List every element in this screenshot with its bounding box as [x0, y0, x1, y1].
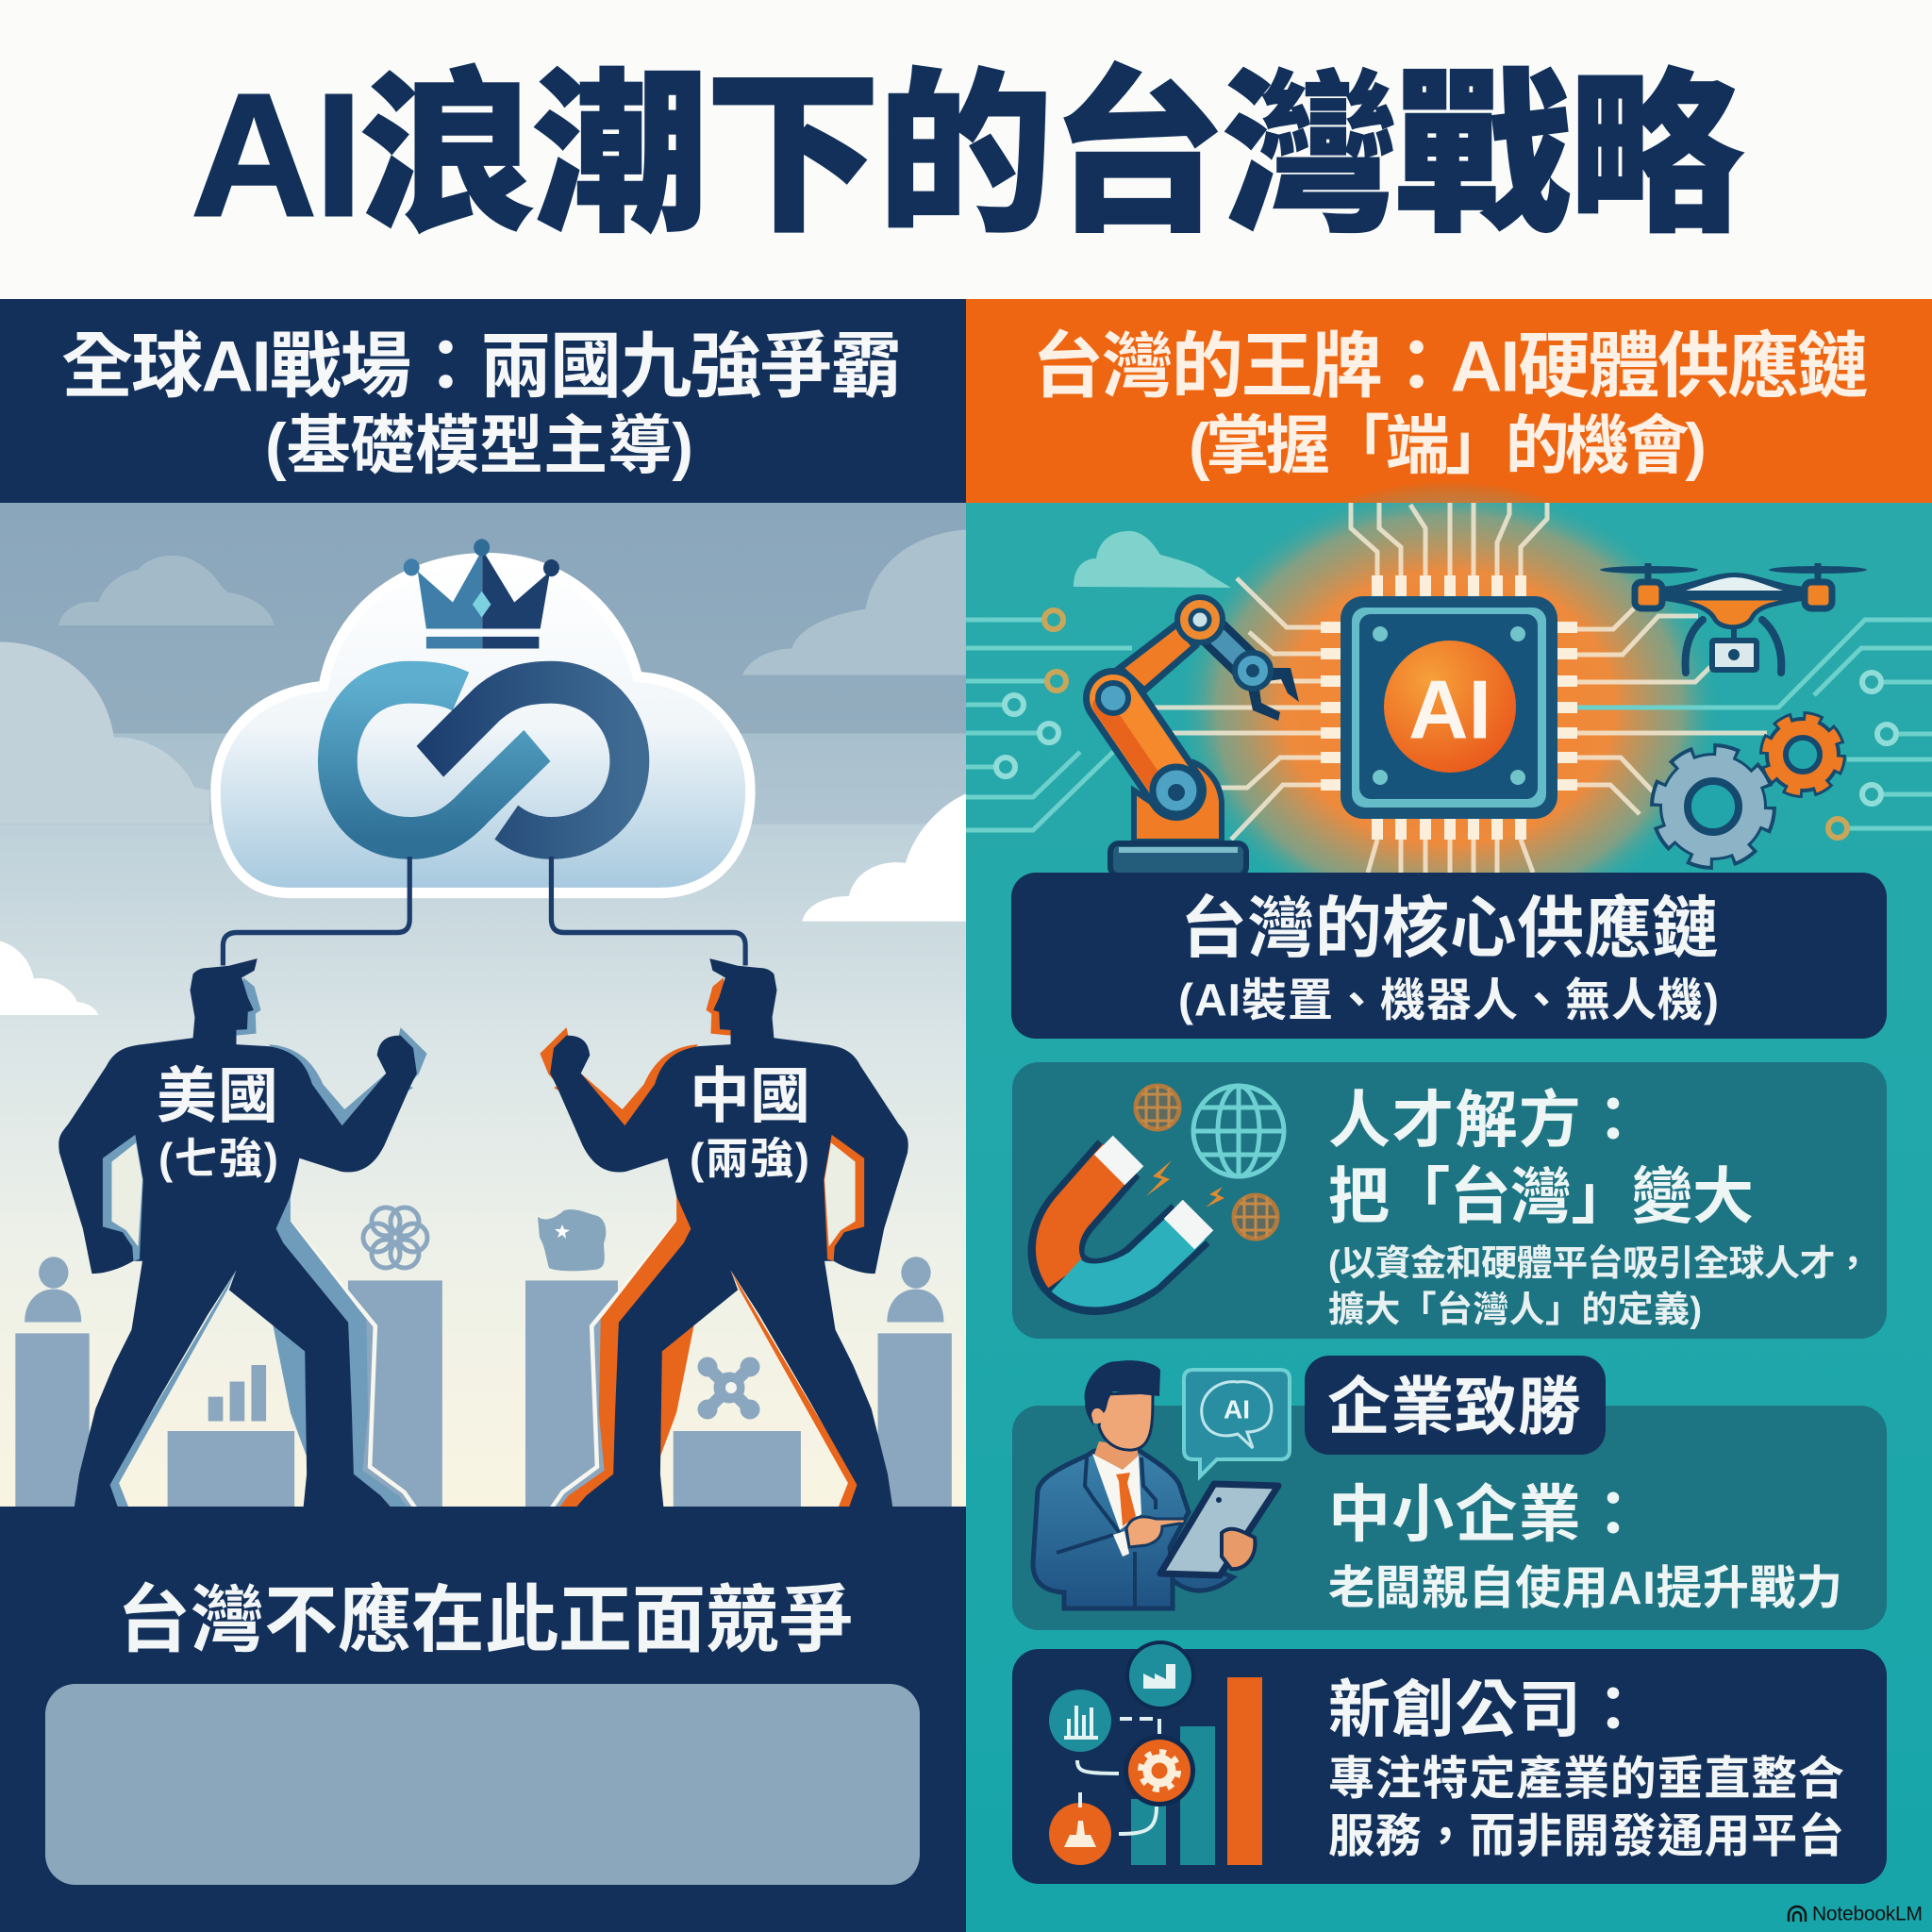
startup description line 2: 服務，而非開發通用平台 [1328, 1811, 1844, 1862]
speech bubble [1184, 1370, 1290, 1476]
chip body [1341, 596, 1557, 819]
title: AI浪潮下的台灣戰略 [191, 58, 1743, 253]
icon: blob logo [538, 1209, 606, 1271]
panel: right header [966, 299, 1932, 503]
label: two giants: (兩強) [690, 1134, 809, 1183]
card: core supply chain [1011, 873, 1887, 1039]
icon: businessman with tablet [1033, 1360, 1290, 1608]
empty placeholder box [45, 1684, 920, 1885]
SME description: 老闆親自使用AI提升戰力 [1328, 1563, 1842, 1614]
heading: Taiwan's trump card: 台灣的王牌：AI硬體供應鏈 [1032, 326, 1869, 408]
card: talent solution [1012, 1062, 1887, 1339]
heading: global AI battlefield: 全球AI戰場：兩國九強爭霸 [61, 326, 902, 408]
card: startups [1012, 1641, 1887, 1884]
panel: left battlefield illustration [0, 503, 966, 1510]
illustration: AI chip and hardware [966, 481, 1932, 934]
crown [404, 539, 559, 649]
icon: small cloud [1074, 531, 1231, 588]
subheading: foundation models: (基礎模型主導) [265, 410, 693, 482]
podium bars [15, 1280, 952, 1507]
speech bubble: AI [1224, 1394, 1250, 1424]
NotebookLM watermark: NotebookLM [1812, 1904, 1923, 1924]
icon: knot logo [363, 1208, 427, 1268]
talent subheading: 把「台灣」變大 [1328, 1162, 1754, 1230]
startup description line 1: 專注特定產業的垂直整合 [1328, 1754, 1844, 1805]
icon: vertical integration chart [1049, 1641, 1262, 1865]
subheading: edge opportunity: (掌握「端」的機會) [1189, 410, 1707, 482]
icon: cross logo [698, 1357, 759, 1419]
panel: left header [0, 299, 966, 503]
figure: China silhouette [540, 958, 908, 1510]
panel: right illustration and cards background [966, 503, 1932, 1932]
icon: large gear [1662, 756, 1764, 858]
background clouds [0, 530, 966, 1015]
icon: mini bars [208, 1365, 266, 1421]
label: seven giants: (七強) [158, 1134, 278, 1183]
orange glow [1175, 481, 1723, 934]
SME heading: 中小企業： [1328, 1479, 1644, 1549]
talent heading: 人才解方： [1328, 1085, 1644, 1155]
conclusion text: 台灣不應在此正面競爭 [117, 1578, 853, 1661]
infinity symbol [338, 682, 629, 838]
icon: person left [25, 1257, 81, 1323]
label: USA: 美國 [157, 1062, 278, 1130]
circuit traces [966, 620, 1932, 830]
figure: USA silhouette [58, 958, 427, 1510]
icon: person right [887, 1257, 943, 1323]
connector lines [223, 857, 745, 966]
tag: enterprise wins: 企業致勝 [1327, 1372, 1581, 1443]
card: SMEs [1012, 1356, 1887, 1630]
panel: left bottom conclusion [0, 1507, 966, 1932]
icon: small gear [1769, 721, 1837, 789]
circuit nodes [996, 610, 1896, 838]
tag: enterprise wins [1305, 1356, 1606, 1455]
icon: magnet and globes [1056, 1086, 1284, 1287]
talent description line 2: 擴大「台灣人」的定義) [1328, 1291, 1702, 1330]
card subheading: (AI裝置、機器人、無人機) [1178, 975, 1719, 1026]
label: China: 中國 [690, 1062, 810, 1130]
chip pins [1321, 575, 1577, 840]
main cloud [216, 558, 750, 892]
card heading: 台灣的核心供應鏈 [1180, 892, 1719, 966]
AI circle [1384, 641, 1516, 773]
talent description line 1: (以資金和硬體平台吸引全球人才， [1328, 1244, 1871, 1284]
chip label: AI [1408, 662, 1491, 757]
startup heading: 新創公司： [1328, 1674, 1644, 1744]
icon: drone [1600, 563, 1867, 673]
icon: robot arm [1098, 597, 1299, 875]
